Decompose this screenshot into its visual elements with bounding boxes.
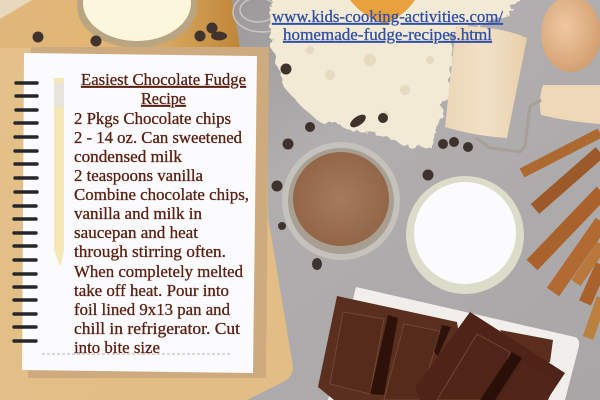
recipe text: When completely melted: [74, 262, 243, 281]
recipe text: take off heat. Pour into: [74, 281, 229, 300]
url link: [272, 7, 503, 44]
whisk: [233, 0, 291, 32]
roller handle: [476, 85, 600, 152]
recipe text: [74, 109, 249, 357]
recipe title: Easiest Chocolate Fudge: [81, 70, 246, 89]
recipe text: foil lined 9x13 pan and: [74, 300, 230, 319]
wooden board: top: [0, 0, 240, 48]
egg yolk: [350, 0, 415, 24]
recipe text: 2 teaspoons vanilla: [74, 166, 203, 185]
recipe text: chill in refrigerator. Cut: [74, 319, 240, 338]
url link: www.kids-cooking-activities.com/: [272, 7, 503, 26]
url link: homemade-fudge-recipes.html: [283, 25, 492, 44]
recipe text: through stirring often.: [74, 242, 226, 261]
recipe text: saucepan and heat: [74, 223, 198, 242]
wooden board: lower: [0, 48, 293, 400]
flour pile: [268, 0, 528, 148]
recipe text: into bite size: [74, 338, 160, 357]
chocolate chips on board: [32, 22, 227, 46]
notebook page: [22, 53, 257, 373]
recipe text: vanilla and milk in: [74, 204, 202, 223]
chocolate bars: [318, 296, 565, 400]
spiral binding: [14, 83, 37, 341]
recipe text: Combine chocolate chips,: [74, 185, 249, 204]
notebook backing: [28, 47, 269, 378]
recipe title: Recipe: [141, 89, 186, 108]
glass bowl: cream: [77, 0, 197, 48]
recipe text: 2 - 14 oz. Can sweetened: [74, 128, 242, 147]
egg: [541, 0, 600, 72]
cinnamon sticks: [522, 133, 600, 338]
recipe text: 2 Pkgs Chocolate chips: [74, 109, 231, 128]
pencil: [54, 78, 64, 266]
white plate: [328, 287, 579, 400]
wooden roller: [445, 26, 527, 138]
glass bowl: cocoa: [282, 142, 400, 260]
chocolate chips on table: [272, 64, 473, 270]
recipe text: condensed milk: [74, 147, 183, 166]
dashed note line: [42, 353, 230, 355]
recipe title: [81, 70, 246, 108]
glass bowl: milk: [406, 176, 524, 294]
rolling pin corner: [0, 0, 32, 19]
